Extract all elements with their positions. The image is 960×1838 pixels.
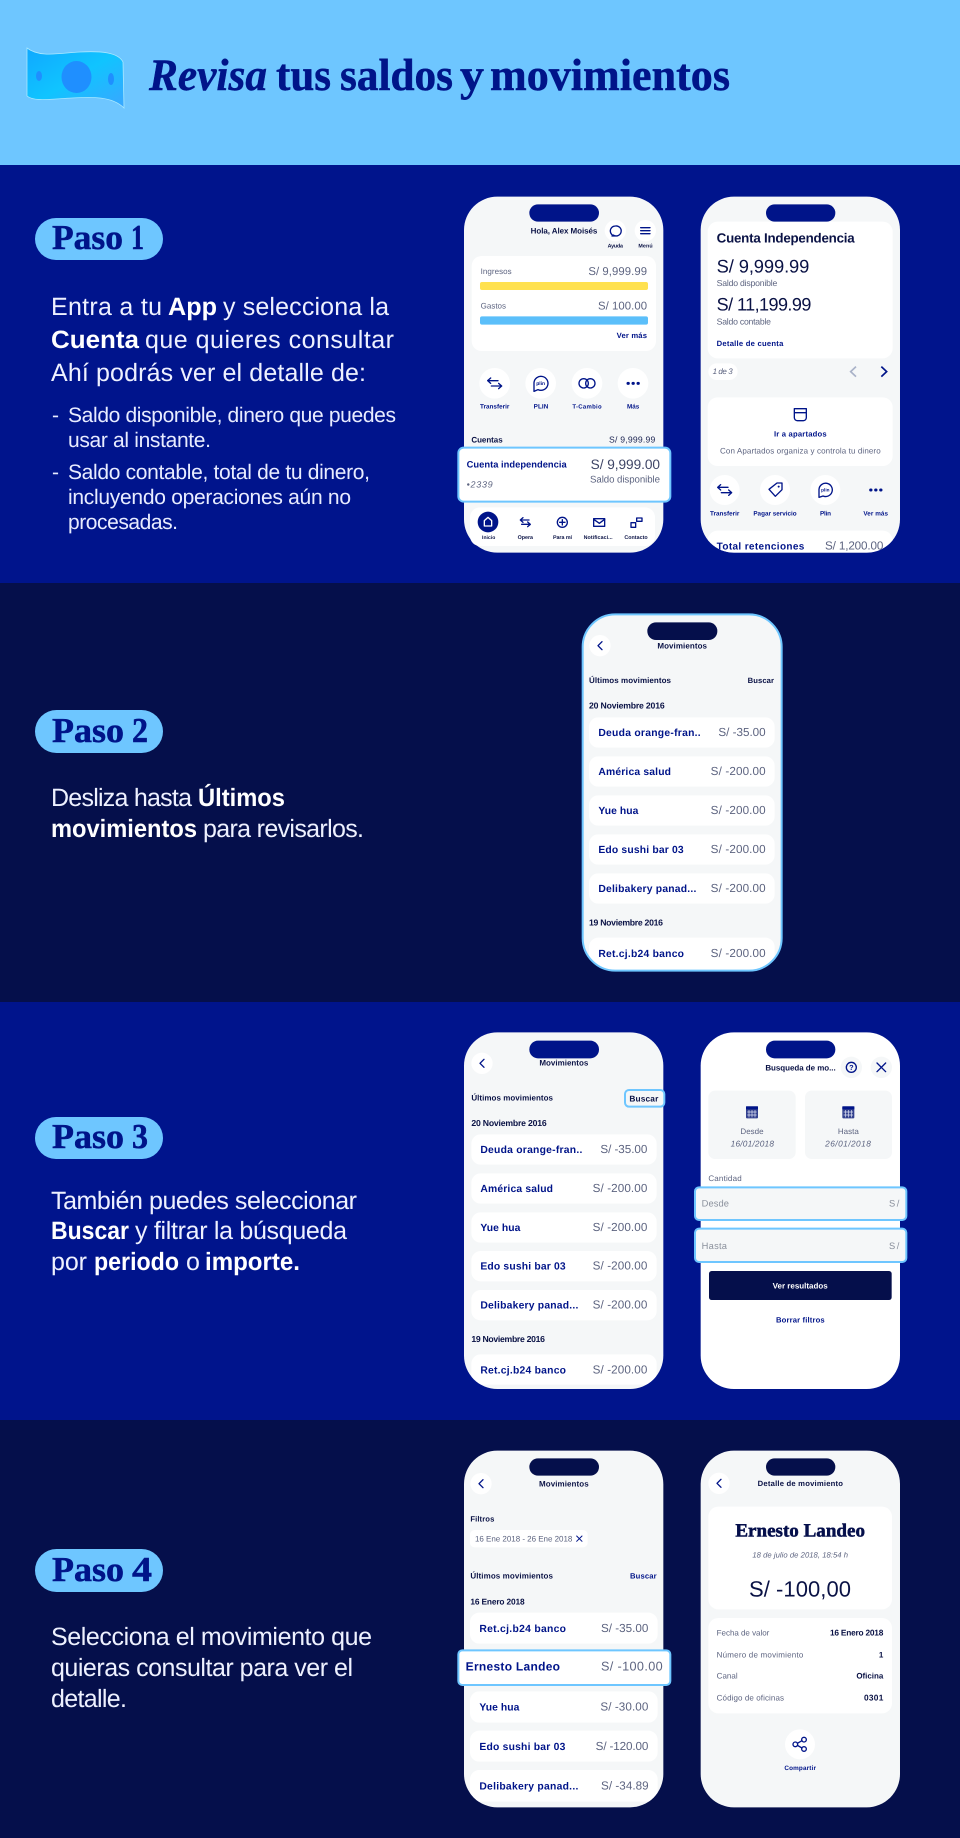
icon: compartir: Compartir — [784, 1765, 816, 1772]
phone: detalle de movimiento — [701, 1451, 900, 1807]
list: movimientos: S/ -200.00 — [711, 804, 766, 817]
text: instrucciones paso 1: y selecciona la — [223, 293, 389, 321]
title: y — [460, 50, 485, 100]
card: ingresos y gastos: S/ 9,999.99 — [588, 265, 647, 278]
text: instrucciones paso 4 — [51, 1623, 372, 1713]
step badge: paso 4: Paso — [52, 1550, 124, 1589]
card: total retenciones: Total retenciones — [717, 541, 804, 552]
phone: filtros de búsqueda — [695, 1032, 906, 1389]
step badge: paso 2: 2 — [132, 711, 148, 750]
callout: ernesto landeo: Ernesto Landeo — [466, 1660, 560, 1673]
phone: últimos movimientos: Movimientos — [657, 641, 707, 650]
icon: compartir — [784, 1729, 816, 1772]
card: saldos: S/ 9,999.99 — [717, 256, 809, 277]
card: saldos: Detalle de cuenta — [717, 339, 783, 348]
icons: acciones de cuenta: Ver más — [863, 510, 888, 517]
callout: buscar — [625, 1090, 664, 1107]
list: movimientos: S/ -35.00 — [718, 726, 766, 739]
list: movimientos: S/ -200.00 — [593, 1298, 647, 1311]
icons: accesos rápidos: PLIN — [534, 403, 548, 410]
text: instrucciones paso 2: Desliza hasta — [51, 784, 192, 812]
callout: campo desde: S/ — [889, 1198, 899, 1209]
list: movimientos filtrados: S/ -34.89 — [601, 1779, 649, 1792]
list: movimientos — [471, 1134, 657, 1385]
text: instrucciones paso 3: importe. — [205, 1248, 300, 1276]
card: datos del movimiento: Código de oficinas — [717, 1693, 784, 1702]
phone: inicio de la app: S/ 9,999.99 — [609, 434, 655, 444]
text: instrucciones paso 1: - — [52, 461, 59, 484]
text: instrucciones paso 1: incluyendo operaciones aún no — [68, 486, 351, 509]
card: fecha desde: Desde — [740, 1127, 764, 1136]
card: total retenciones: S/ 1,200.00 — [825, 539, 883, 552]
phone: buscar movimientos: 20 Noviembre 2016 — [471, 1118, 547, 1128]
step badge: paso 3: Paso — [52, 1117, 124, 1156]
step badge: paso 4: 4 — [132, 1550, 152, 1589]
phone: inicio de la app: Ayuda — [608, 243, 623, 249]
title: saldos — [340, 50, 453, 100]
icons: acciones de cuenta — [710, 475, 888, 517]
card: saldos: Saldo disponible — [717, 278, 777, 288]
panel: paso 3 — [0, 1002, 960, 1420]
text: instrucciones paso 1: Saldo disponible, dinero que puedes — [68, 404, 396, 427]
phone: últimos movimientos — [583, 614, 782, 978]
icons: accesos rápidos: Transferir — [480, 403, 510, 410]
title: tus — [276, 50, 331, 100]
step badge: paso 1 — [35, 218, 163, 260]
navigation bar: Opera — [518, 535, 533, 540]
card: datos del movimiento: Oficina — [856, 1672, 884, 1681]
card: datos del movimiento: Fecha de valor — [717, 1629, 769, 1638]
list: movimientos: Ret.cj.b24 banco — [480, 1364, 566, 1376]
panel: header — [0, 0, 960, 165]
step badge: paso 4 — [35, 1549, 163, 1592]
text: instrucciones paso 1: Saldo contable, total de tu dinero, — [68, 461, 370, 484]
icons: acciones de cuenta: Plin — [820, 510, 831, 517]
panel: paso 1 — [0, 165, 960, 584]
text: instrucciones paso 3: También puedes seleccionar — [51, 1187, 357, 1215]
list: movimientos filtrados: Edo sushi bar 03 — [479, 1741, 565, 1752]
title: Revisa — [148, 50, 267, 100]
text: instrucciones paso 1: procesadas. — [68, 511, 178, 534]
button: ver resultados: Ver resultados — [773, 1281, 828, 1290]
card: fecha hasta: 26/01/2018 — [825, 1139, 871, 1149]
title — [148, 50, 730, 100]
list: movimientos filtrados: S/ -30.00 — [600, 1700, 648, 1713]
icons: accesos rápidos: Más — [627, 403, 639, 410]
phone: inicio de la app: Hola, Alex Moisés — [531, 226, 597, 235]
phone: buscar movimientos: Movimientos — [539, 1059, 588, 1068]
list: movimientos: Yue hua — [598, 805, 639, 816]
phone: movimientos filtrados: Buscar — [630, 1571, 657, 1580]
filter chip — [470, 1530, 588, 1547]
phone: detalle de cuenta: 1 de 3 — [713, 367, 733, 376]
card: fecha desde: 16/01/2018 — [731, 1139, 774, 1149]
phone: movimientos filtrados: Movimientos — [539, 1479, 589, 1488]
phone: movimientos filtrados: Filtros — [470, 1514, 494, 1523]
text: instrucciones paso 3 — [51, 1187, 357, 1276]
filter chip: 16 Ene 2018 - 26 Ene 2018 — [475, 1534, 572, 1543]
callout: cuenta independencia: Cuenta independencia — [467, 459, 567, 470]
phone: últimos movimientos: 19 Noviembre 2016 — [589, 918, 663, 928]
text: instrucciones paso 3: o — [186, 1248, 200, 1276]
callout: cuenta independencia: S/ 9,999.00 — [591, 457, 660, 472]
phone: inicio de la app — [458, 197, 670, 553]
callout: campo desde — [695, 1187, 906, 1220]
list: movimientos filtrados — [470, 1613, 658, 1802]
phone: filtros de búsqueda: ? — [849, 1063, 854, 1072]
list: movimientos: América salud — [480, 1183, 553, 1194]
text: instrucciones paso 3: periodo — [94, 1248, 179, 1276]
callout: campo hasta: S/ — [889, 1241, 899, 1251]
phone: movimientos filtrados: Últimos movimientos — [470, 1571, 553, 1580]
card: datos del movimiento: Canal — [717, 1672, 738, 1681]
list: movimientos: Deuda orange-fran.. — [598, 727, 701, 738]
text: instrucciones paso 1: - — [52, 404, 59, 427]
list: movimientos filtrados: Yue hua — [479, 1701, 520, 1713]
list: movimientos: Delibakery panad... — [480, 1299, 578, 1311]
panel: paso 4 — [35, 1450, 900, 1808]
text: instrucciones paso 2 — [51, 783, 364, 843]
card: ingresos y gastos: Ingresos — [481, 267, 512, 276]
list: movimientos: S/ -200.00 — [593, 1259, 647, 1272]
list: movimientos: Delibakery panad... — [598, 883, 696, 894]
phone: buscar movimientos — [464, 1032, 664, 1389]
navigation bar: Notificaci... — [584, 535, 613, 540]
phone: movimientos filtrados: 16 Enero 2018 — [470, 1597, 525, 1607]
step badge: paso 3 — [35, 1117, 163, 1159]
icon: banknote — [27, 48, 124, 108]
phone: filtros de búsqueda: Busqueda de mo... — [765, 1063, 836, 1072]
phone: inicio de la app: Menú — [638, 243, 653, 249]
icons: acciones de cuenta: Pagar servicio — [753, 510, 797, 517]
card: datos del movimiento — [708, 1618, 892, 1713]
phone: filtros de búsqueda: Borrar filtros — [776, 1315, 825, 1324]
card: total retenciones — [708, 531, 893, 553]
list: movimientos — [589, 717, 775, 978]
text: instrucciones paso 1: usar al instante. — [68, 429, 211, 452]
phone: buscar movimientos: Últimos movimientos — [471, 1093, 553, 1102]
list: movimientos: Yue hua — [480, 1222, 521, 1233]
card: ingresos y gastos: Ver más — [617, 331, 647, 340]
callout: buscar: Buscar — [629, 1094, 658, 1104]
list: movimientos: S/ -35.00 — [600, 1143, 647, 1156]
card: saldos: Cuenta Independencia — [717, 231, 855, 245]
card: fecha hasta: Hasta — [838, 1127, 859, 1136]
card: saldos: S/ 11,199.99 — [717, 295, 811, 315]
text: instrucciones paso 1: Ahí podrás ver el detalle de: — [51, 359, 366, 387]
callout: campo hasta: Hasta — [702, 1241, 727, 1251]
list: movimientos: Ret.cj.b24 banco — [598, 948, 684, 959]
list: movimientos: Deuda orange-fran.. — [480, 1144, 582, 1155]
title: movimientos — [490, 50, 730, 100]
text: instrucciones paso 3: y filtrar la búsqueda — [135, 1217, 347, 1245]
phone: últimos movimientos: Últimos movimientos — [589, 676, 671, 685]
list: movimientos filtrados: S/ -35.00 — [601, 1622, 648, 1635]
navigation bar: Inicio — [482, 535, 495, 540]
list: movimientos filtrados: S/ -120.00 — [596, 1740, 648, 1753]
callout: cuenta independencia — [458, 448, 670, 502]
callout: cuenta independencia: •2339 — [467, 479, 493, 489]
card: ir a apartados: Con Apartados organiza y controla tu dinero — [720, 446, 881, 455]
list: movimientos: S/ -200.00 — [593, 1182, 647, 1195]
phone: detalle de movimiento: Detalle de movimiento — [758, 1479, 843, 1488]
card: ingresos y gastos: Gastos — [481, 301, 506, 310]
card: fecha desde — [708, 1091, 796, 1159]
list: movimientos: S/ -200.00 — [711, 882, 766, 895]
card: datos del movimiento: 16 Enero 2018 — [830, 1628, 883, 1638]
list: movimientos: Edo sushi bar 03 — [480, 1260, 566, 1272]
card: importe — [708, 1507, 892, 1609]
button: ver resultados — [709, 1271, 892, 1300]
navigation bar: Contacto — [624, 535, 648, 540]
callout: campo desde: Desde — [702, 1198, 729, 1209]
callout: ernesto landeo: S/ -100.00 — [601, 1660, 663, 1674]
list: movimientos: S/ -200.00 — [593, 1363, 647, 1376]
text: instrucciones paso 1: App — [168, 293, 217, 321]
navigation bar — [470, 507, 655, 546]
step badge: paso 1: 1 — [131, 218, 144, 257]
list: movimientos: S/ -200.00 — [711, 947, 766, 960]
text: instrucciones paso 2: movimientos — [51, 815, 197, 843]
step badge: paso 2 — [35, 710, 163, 753]
card: importe: S/ -100,00 — [749, 1577, 851, 1601]
card: datos del movimiento: 0301 — [864, 1693, 883, 1702]
card: ir a apartados: Ir a apartados — [774, 429, 827, 438]
text: instrucciones paso 2: para revisarlos. — [203, 815, 364, 843]
callout: campo hasta — [695, 1229, 906, 1262]
card: importe: 18 de julio de 2018, 18:54 h — [752, 1551, 848, 1559]
text: instrucciones paso 1: Entra a tu — [51, 293, 162, 321]
callout: cuenta independencia: Saldo disponible — [590, 474, 660, 485]
list: movimientos filtrados: Delibakery panad... — [479, 1780, 578, 1792]
text: instrucciones paso 1: que quieres consultar — [145, 326, 394, 354]
text: instrucciones paso 1: Cuenta — [51, 326, 140, 354]
step badge: paso 3: 3 — [132, 1117, 148, 1156]
step badge: paso 2: Paso — [52, 711, 124, 750]
navigation bar: Para mí — [553, 535, 572, 540]
list: movimientos: S/ -200.00 — [711, 843, 766, 856]
text: instrucciones paso 4: quieras consultar para ver el — [51, 1654, 353, 1682]
list: movimientos: S/ -200.00 — [593, 1221, 647, 1234]
card: saldos — [708, 222, 893, 358]
list: movimientos: S/ -200.00 — [711, 765, 766, 778]
panel: paso 2 — [0, 583, 960, 1002]
card: ir a apartados — [708, 397, 893, 466]
text: instrucciones paso 3: por — [51, 1248, 87, 1276]
card: datos del movimiento: Número de movimiento — [717, 1650, 803, 1659]
text: instrucciones paso 1 — [51, 293, 396, 534]
icons: accesos rápidos — [479, 368, 648, 410]
list: movimientos: Edo sushi bar 03 — [598, 844, 684, 855]
card: ingresos y gastos: S/ 100.00 — [598, 299, 647, 312]
phone: últimos movimientos: Buscar — [748, 676, 774, 685]
icons: acciones de cuenta: plin — [821, 487, 829, 493]
callout: ernesto landeo — [458, 1650, 670, 1685]
text: instrucciones paso 3: Buscar — [51, 1217, 129, 1245]
text: instrucciones paso 4: detalle. — [51, 1685, 127, 1713]
icons: accesos rápidos: plin — [536, 381, 545, 386]
phone: movimientos filtrados — [458, 1451, 670, 1807]
phone: filtros de búsqueda: Cantidad — [708, 1174, 742, 1183]
card: datos del movimiento: 1 — [879, 1650, 883, 1659]
icons: acciones de cuenta: Transferir — [710, 510, 740, 517]
card: importe: Ernesto Landeo — [735, 1520, 865, 1541]
list: movimientos: América salud — [598, 766, 671, 777]
card: ingresos y gastos — [472, 256, 656, 351]
card: saldos: Saldo contable — [717, 317, 771, 327]
text: instrucciones paso 2: Últimos — [198, 783, 285, 812]
card: fecha hasta — [805, 1091, 892, 1159]
icons: accesos rápidos: T-Cambio — [572, 403, 602, 410]
list: movimientos filtrados: Ret.cj.b24 banco — [479, 1623, 566, 1634]
phone: inicio de la app: Cuentas — [471, 435, 503, 444]
text: instrucciones paso 4: Selecciona el movimiento que — [51, 1623, 372, 1651]
phone: detalle de cuenta — [701, 197, 900, 567]
phone: buscar movimientos: 19 Noviembre 2016 — [471, 1334, 545, 1344]
phone: últimos movimientos: 20 Noviembre 2016 — [589, 701, 665, 711]
step badge: paso 1: Paso — [52, 218, 123, 257]
